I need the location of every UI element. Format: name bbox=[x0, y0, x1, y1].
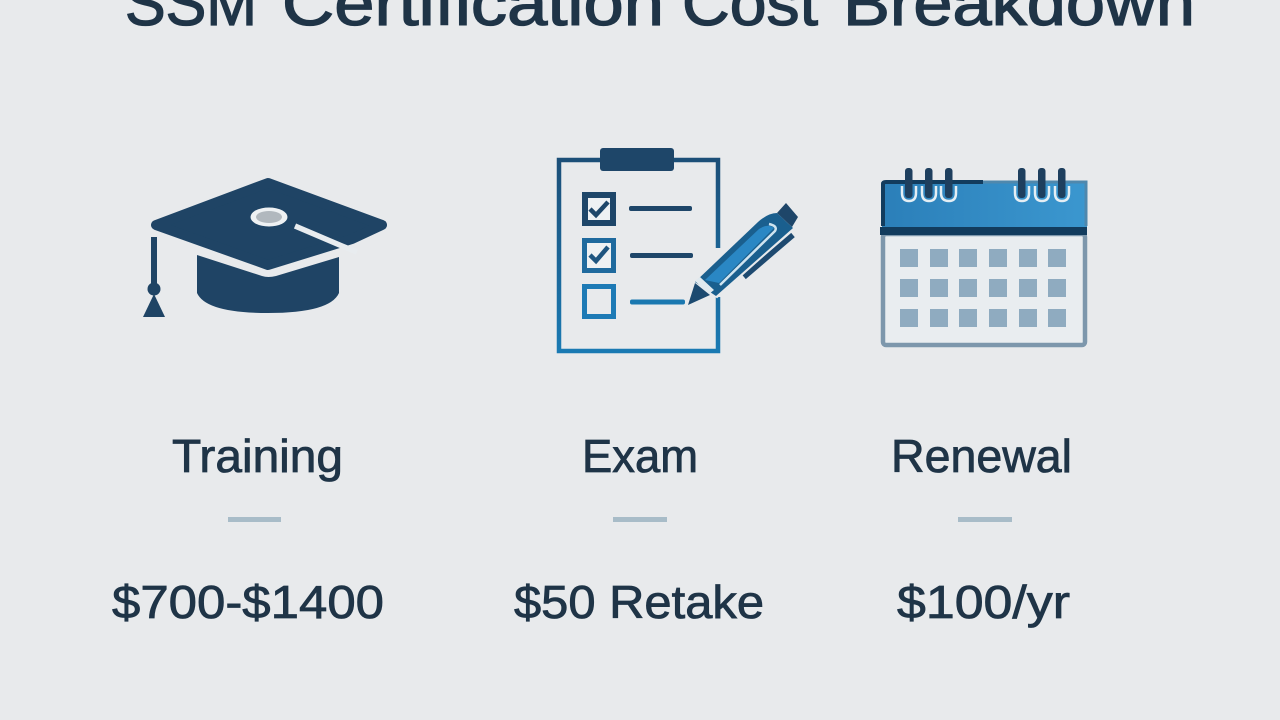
column: training: Training bbox=[172, 430, 343, 482]
column: renewal: Renewal bbox=[891, 430, 1072, 482]
pen bbox=[688, 203, 798, 305]
column: exam: Exam bbox=[582, 430, 698, 482]
column: renewal bbox=[891, 430, 1072, 628]
column: exam bbox=[514, 430, 764, 628]
column: training bbox=[112, 430, 384, 628]
title bbox=[125, 0, 1195, 39]
icon: calendar bbox=[880, 168, 1087, 345]
column: training: $700-$1400 bbox=[112, 576, 384, 628]
column: renewal: $100/yr bbox=[897, 576, 1070, 628]
icon: graduation cap bbox=[143, 183, 382, 317]
column: exam: $50 Retake bbox=[514, 576, 764, 628]
icon: checklist clipboard with pen bbox=[559, 148, 798, 351]
